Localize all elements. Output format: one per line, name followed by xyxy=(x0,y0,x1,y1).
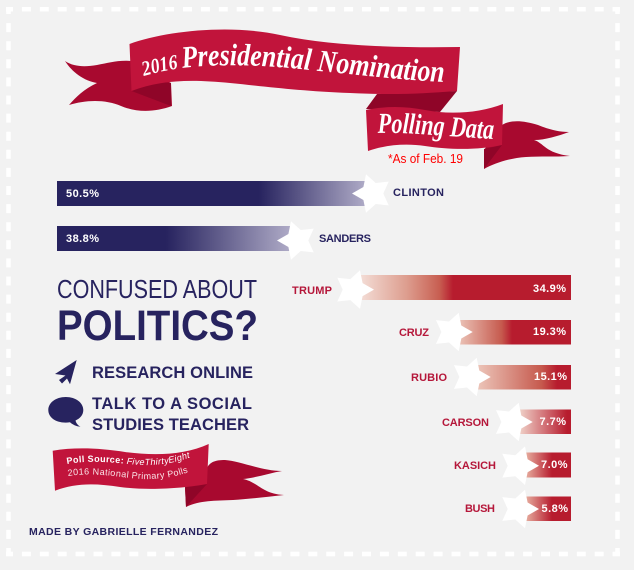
source banner tail xyxy=(185,460,284,507)
sanders star xyxy=(277,221,314,260)
polling data text: Polling Data xyxy=(378,113,494,142)
bush value: 5.8% xyxy=(542,503,568,515)
bar: cruz xyxy=(399,313,571,351)
rubio star xyxy=(454,358,491,396)
bar: trump xyxy=(292,270,571,309)
polling tail fold xyxy=(484,145,502,169)
bar: kasich xyxy=(454,446,571,485)
source banner line two: 2016 National Primary Polls xyxy=(68,468,188,480)
kasich value: 7.0% xyxy=(541,459,568,471)
banner connecting fold xyxy=(366,91,457,112)
sanders bar fill xyxy=(57,226,291,251)
source banner fold xyxy=(185,484,207,507)
kasich label: KASICH xyxy=(454,460,496,472)
bar: carson xyxy=(442,403,571,441)
kasich star xyxy=(502,446,539,485)
text: talk to a social studies teacher xyxy=(92,395,252,434)
banner main ribbon xyxy=(130,30,460,94)
text: talk to a social studies teacher: STUDIES TEACHER xyxy=(92,416,249,434)
text: research online: RESEARCH ONLINE xyxy=(92,364,253,382)
carson value: 7.7% xyxy=(540,416,566,428)
rubio label: RUBIO xyxy=(411,372,447,384)
carson bar fill xyxy=(520,410,571,434)
icon: speech bubble xyxy=(48,397,83,427)
clinton star xyxy=(352,174,389,213)
bush star xyxy=(502,490,539,528)
bar: clinton xyxy=(57,174,444,213)
trump star xyxy=(337,270,374,309)
bar: bush xyxy=(465,490,571,528)
banner: polling data xyxy=(366,104,570,169)
clinton value: 50.5% xyxy=(66,188,99,200)
banner: poll source xyxy=(52,444,284,507)
cruz bar fill xyxy=(460,320,571,344)
rubio value: 15.1% xyxy=(534,371,567,383)
cruz value: 19.3% xyxy=(533,326,566,338)
bush label: BUSH xyxy=(465,503,495,515)
banner left fold xyxy=(132,80,171,106)
cruz label: CRUZ xyxy=(399,327,429,339)
cruz star xyxy=(436,313,473,351)
carson star xyxy=(496,403,533,441)
bush bar fill xyxy=(526,496,571,521)
clinton label: CLINTON xyxy=(393,187,444,199)
trump label: TRUMP xyxy=(292,285,332,297)
banner title text: 2016 Presidential Nomination xyxy=(142,44,444,82)
source banner ribbon xyxy=(53,444,209,491)
credit: MADE BY GABRIELLE FERNANDEZ xyxy=(29,526,219,538)
carson label: CARSON xyxy=(442,417,489,429)
footnote: as of date: *As of Feb. 19 xyxy=(388,152,463,166)
polling right tail xyxy=(484,121,570,169)
trump bar fill xyxy=(361,275,571,300)
polling ribbon xyxy=(366,104,503,151)
clinton bar fill xyxy=(57,181,366,206)
bar: sanders xyxy=(57,221,371,260)
sanders value: 38.8% xyxy=(66,233,99,245)
heading: confused about: CONFUSED ABOUT xyxy=(57,276,257,304)
text: talk to a social studies teacher: TALK TO A SOCIAL xyxy=(92,395,252,413)
banner: presidential nomination xyxy=(65,30,460,112)
bar: rubio xyxy=(411,358,571,396)
rubio bar fill xyxy=(478,365,571,390)
sanders label: SANDERS xyxy=(319,233,371,245)
source banner line one: Poll Source: FiveThirtyEight xyxy=(66,452,190,466)
heading: politics: POLITICS? xyxy=(57,302,258,350)
icon: cursor arrow xyxy=(55,360,77,384)
banner left tail xyxy=(65,61,172,111)
trump value: 34.9% xyxy=(533,283,566,295)
kasich bar fill xyxy=(526,452,571,478)
